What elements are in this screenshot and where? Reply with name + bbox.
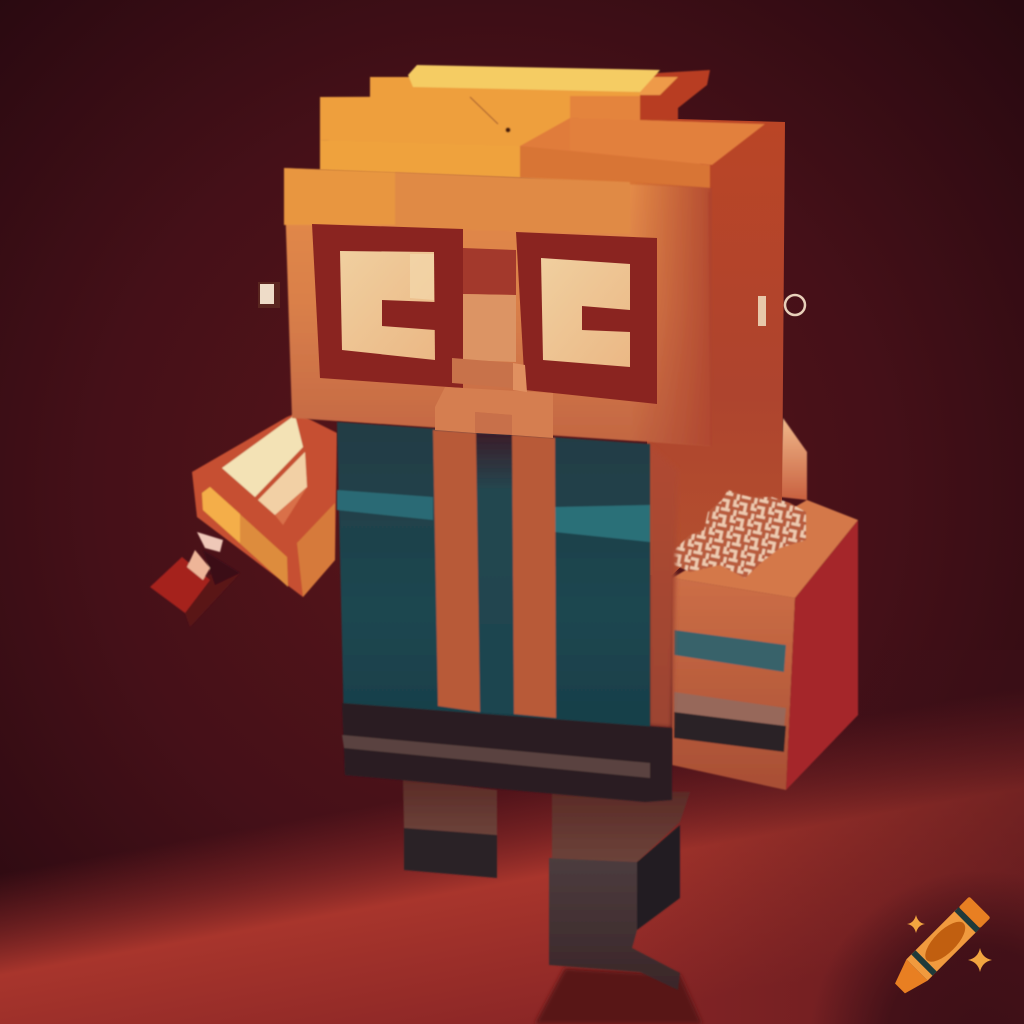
lens highlight [410, 254, 434, 300]
head side base [640, 118, 785, 575]
ear left [258, 282, 280, 308]
logo: crayon [889, 897, 992, 998]
hair [320, 65, 765, 192]
center strip [476, 433, 514, 714]
nose and strap arch [435, 358, 553, 438]
right lens [541, 258, 630, 367]
right arm block [672, 418, 858, 790]
head front [284, 168, 712, 446]
speckled popcorn pile [672, 490, 806, 578]
light bands [337, 490, 433, 520]
left leg [403, 778, 497, 878]
suspender left [433, 430, 480, 712]
left arm block [192, 413, 337, 597]
hand with bottle [150, 532, 240, 627]
glasses [312, 224, 657, 404]
right leg [549, 790, 690, 990]
floor shadow: bottom right [800, 860, 1024, 1024]
floor glow [0, 650, 1024, 1024]
sparkles [907, 915, 925, 933]
ear right [758, 295, 805, 326]
suspender right [512, 435, 556, 718]
torso [337, 422, 672, 802]
belt [342, 703, 672, 802]
torso right edge [648, 444, 678, 728]
floor dimming toward the right [0, 650, 1024, 1024]
left lens [340, 251, 435, 360]
foot shadow [535, 968, 702, 1024]
